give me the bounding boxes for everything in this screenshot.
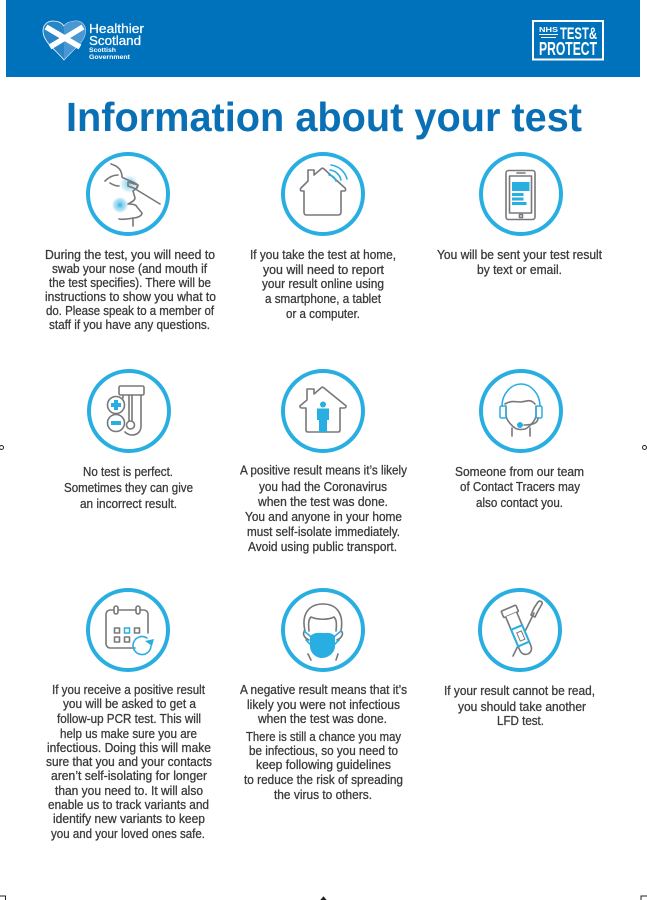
text: positive result: you had the Coronavirus	[259, 480, 387, 494]
text: positive result: must self-isolate immediately.	[247, 525, 400, 539]
text: follow-up PCR: help us make sure you are	[60, 727, 197, 741]
icon: phone	[481, 154, 561, 234]
text: negative result: to reduce the risk of spreading	[244, 773, 403, 787]
icon: test tube with plus and minus	[89, 371, 169, 451]
icon: house with wifi	[283, 154, 363, 234]
text: follow-up PCR: aren’t self-isolating for longer	[51, 769, 207, 783]
text: home test reporting: you will need to report	[263, 263, 385, 277]
text: negative result: A negative result means that it’s	[240, 683, 407, 697]
text: home test reporting: a smartphone, a tablet	[265, 292, 381, 306]
logo: Healthier Scotland: Scottish	[89, 47, 116, 54]
text: contact tracers: Someone from our team	[455, 465, 584, 479]
text: negative result: be infectious, so you need to	[249, 744, 398, 758]
text: follow-up PCR: you will be asked to get a	[63, 697, 196, 711]
text: follow-up PCR: sure that you and your contacts	[46, 755, 212, 769]
logo: Healthier Scotland: Scotland	[89, 33, 141, 48]
logo: NHS Test and Protect: NHS	[539, 27, 558, 34]
icon: face mask	[283, 590, 363, 670]
text: home test reporting	[250, 248, 396, 321]
registration marks	[0, 446, 647, 900]
text: negative result	[240, 683, 407, 802]
text: home test reporting: your result online using	[262, 277, 384, 291]
icon: swab in nose	[88, 154, 168, 234]
text: swab instructions: the test specifies). There will be	[49, 276, 211, 290]
text: negative result: keep following guidelines	[256, 758, 391, 772]
text: positive result: You and anyone in your home	[245, 510, 402, 524]
text: swab instructions: instructions to show you what to	[45, 290, 216, 304]
text: positive result: when the test was done.	[257, 495, 388, 509]
text: follow-up PCR: than you need to. It will also	[55, 784, 203, 798]
text: contact tracers	[455, 465, 584, 510]
text: follow-up PCR	[46, 683, 212, 841]
logo: NHS Test and Protect: PROTECT	[539, 39, 597, 59]
logo: NHS Test and Protect	[533, 21, 603, 60]
text: follow-up PCR: enable us to track variants and	[48, 798, 209, 812]
text: swab instructions: staff if you have any questions.	[49, 318, 210, 332]
icon: house with person	[283, 371, 363, 451]
icon: contact tracer headset	[481, 371, 561, 451]
text: swab instructions: During the test, you will need to	[45, 248, 215, 262]
text: unreadable result: LFD test.	[497, 714, 544, 728]
text: test result by text: by text or email.	[477, 263, 562, 277]
text: follow-up PCR: follow-up PCR test. This will	[57, 712, 201, 726]
text: home test reporting: If you take the test at home,	[250, 248, 396, 262]
text: home test reporting: or a computer.	[286, 307, 360, 321]
text: follow-up PCR: you and your loved ones safe.	[51, 827, 205, 841]
text: no test is perfect: No test is perfect.	[83, 465, 173, 479]
text: unreadable result: If your result cannot be read,	[444, 684, 595, 698]
text: negative result: likely you were not infectious	[247, 698, 400, 712]
text: negative result: the virus to others.	[274, 788, 372, 802]
logo: Healthier Scotland: Government	[89, 54, 131, 61]
text: no test is perfect: an incorrect result.	[80, 497, 177, 511]
text: contact tracers: also contact you.	[476, 496, 563, 510]
text: unreadable result: you should take another	[458, 700, 586, 714]
text: swab instructions	[45, 248, 216, 332]
text: negative result: There is still a chance you may	[246, 730, 402, 744]
logo: NHS Test and Protect: TEST&	[560, 24, 597, 43]
text: follow-up PCR: identify new variants to keep	[53, 812, 205, 826]
logo: Healthier Scotland	[43, 21, 145, 61]
text: positive result: Avoid using public transport.	[248, 540, 397, 554]
text: follow-up PCR: If you receive a positive result	[52, 683, 205, 697]
text: no test is perfect: Sometimes they can give	[64, 481, 193, 495]
text: follow-up PCR: infectious. Doing this will make	[47, 741, 211, 755]
icon: LFD tube and swab	[480, 590, 560, 670]
header banner	[6, 0, 640, 77]
text: positive result	[240, 464, 408, 554]
text: test result by text: You will be sent your test result	[437, 248, 602, 262]
text: swab instructions: do. Please speak to a member of	[46, 304, 214, 318]
logo: Healthier Scotland: Healthier	[89, 21, 145, 36]
text: swab instructions: swab your nose (and mouth if	[52, 262, 207, 276]
text: unreadable result	[444, 684, 595, 728]
text: no test is perfect	[64, 465, 193, 511]
title: Information about your test	[66, 94, 582, 140]
text: positive result: A positive result means it’s likely	[240, 464, 408, 478]
text: negative result: when the test was done.	[257, 712, 387, 726]
text: test result by text	[437, 248, 602, 277]
icon: calendar with refresh arrow	[88, 590, 168, 670]
text: contact tracers: of Contact Tracers may	[460, 480, 581, 494]
